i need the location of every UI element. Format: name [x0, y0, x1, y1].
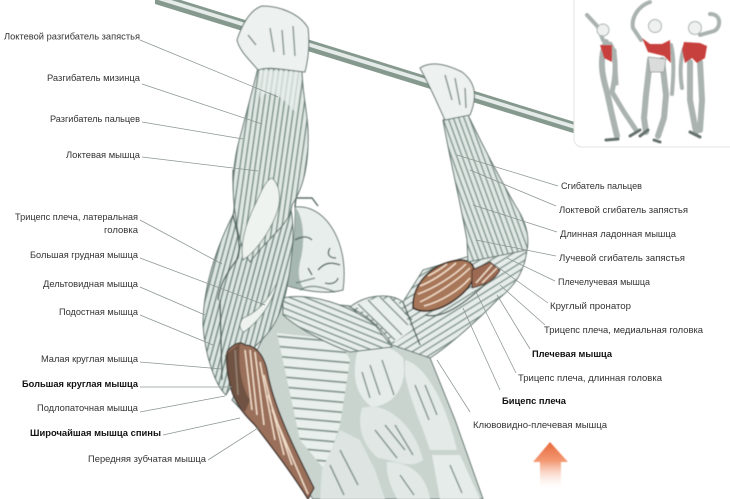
figure: side view — [587, 15, 640, 140]
right forearm and hand — [420, 64, 528, 262]
latissimus — [225, 343, 314, 499]
labels: right side: Локтевой сгибатель запястья — [559, 205, 688, 215]
labels: left side: Большая грудная мышца — [30, 250, 139, 260]
labels: right side: Трицепс плеча, медиальная головка — [544, 325, 704, 335]
labels: right side — [473, 181, 704, 430]
labels: left side: головка — [104, 225, 139, 235]
labels: left side: Локтевая мышца — [66, 150, 141, 160]
labels: right side: Сгибатель пальцев — [561, 181, 642, 191]
head — [285, 198, 344, 292]
leader lines — [140, 40, 558, 460]
torso — [232, 300, 483, 499]
right upper arm — [350, 248, 527, 358]
labels: right side: Клювовидно-плечевая мышца — [473, 420, 608, 430]
labels: right side: Плечелучевая мышца — [558, 277, 651, 287]
figure: pull-up anatomy — [203, 6, 528, 499]
labels: right side: Длинная ладонная мышца — [560, 229, 677, 239]
labels: left side: Разгибатель мизинца — [47, 73, 141, 83]
labels: left side: Передняя зубчатая мышца — [88, 454, 207, 464]
labels: left side: Трицепс плеча, латеральная — [15, 212, 138, 222]
labels: right side: Трицепс плеча, длинная головка — [518, 373, 663, 383]
labels: left side: Большая круглая мышца — [22, 379, 139, 389]
arrow — [533, 442, 568, 490]
figure: back view — [681, 14, 719, 137]
labels: left side: Разгибатель пальцев — [50, 114, 140, 124]
labels: left side: Локтевой разгибатель запястья — [4, 32, 140, 42]
bar — [155, 0, 578, 134]
figure: front view — [633, 2, 673, 142]
labels: right side: Круглый пронатор — [550, 301, 631, 311]
labels: left side — [4, 32, 207, 464]
labels: right side: Лучевой сгибатель запястья — [559, 253, 685, 263]
labels: left side: Подлопаточная мышца — [37, 403, 139, 413]
labels: right side: Бицепс плеча — [502, 396, 567, 406]
labels: right side: Плечевая мышца — [532, 349, 613, 359]
biceps — [413, 260, 500, 311]
labels: left side: Широчайшая мышца спины — [30, 428, 161, 438]
pectoral — [283, 297, 392, 352]
labels: left side: Дельтовидная мышца — [43, 279, 139, 289]
left upper arm — [203, 170, 293, 395]
inset: three figures — [574, 0, 730, 147]
left forearm and hand — [233, 6, 309, 262]
labels: left side: Подостная мышца — [59, 307, 139, 317]
labels: left side: Малая круглая мышца — [41, 354, 139, 364]
